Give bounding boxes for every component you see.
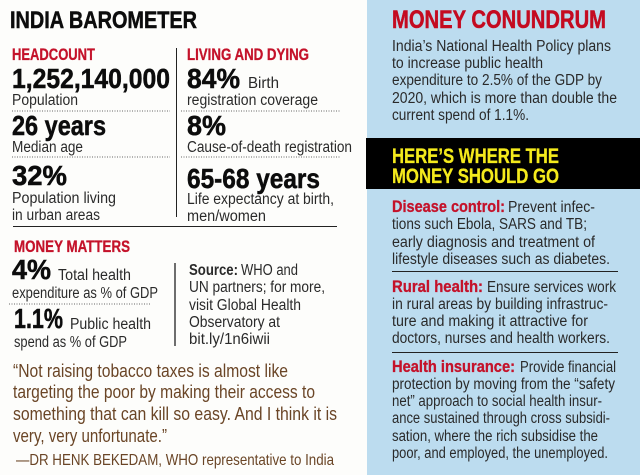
stat: public health spend — [14, 303, 151, 351]
stat: population — [12, 63, 170, 109]
source note: visit Global Health — [189, 297, 301, 314]
item: disease control: lifestyle diseases such as diabetes. — [392, 251, 610, 268]
item: rural health: in rural areas by building infrastruc- — [392, 296, 608, 313]
stat: public health spend: spend as % of GDP — [14, 334, 127, 351]
stat: birth registration: 84% — [187, 63, 240, 94]
item: rural health: doctors, nurses and health workers. — [392, 330, 610, 347]
item: disease control: Prevent infec- — [508, 199, 595, 216]
heading: LIVING AND DYING — [187, 46, 309, 64]
body text — [392, 38, 617, 124]
stat: median age — [12, 110, 106, 156]
title: INDIA BAROMETER — [10, 7, 197, 34]
stat: population: 1,252,140,000 — [12, 63, 170, 94]
item: health insurance: Provide financial — [520, 359, 616, 376]
stat: urban population — [12, 160, 116, 224]
quote: very, very unfortunate.” — [13, 426, 167, 446]
banner: here's where the money should go: MONEY SHOULD GO — [392, 165, 559, 188]
quote — [13, 361, 337, 469]
banner: here's where the money should go: HERE’S WHERE THE — [392, 145, 559, 168]
heading: MONEY MATTERS — [14, 238, 130, 256]
stat: median age: Median age — [12, 139, 83, 156]
stat: cause-of-death registration — [187, 110, 352, 156]
item: disease control: tions such Ebola, SARS and TB; — [392, 216, 587, 233]
stat: public health spend: 1.1% — [14, 303, 63, 334]
stat: cause-of-death registration: Cause-of-death registration — [187, 139, 352, 156]
stat: life expectancy — [187, 163, 334, 225]
item: rural health: ture and making it attractive for — [392, 313, 588, 330]
source note: Source: — [189, 262, 238, 279]
item: rural health — [392, 277, 616, 347]
source note — [189, 262, 325, 348]
stat: median age: 26 years — [12, 110, 106, 141]
item: rural health: Ensure services work — [487, 279, 616, 296]
source note: Observatory at — [189, 314, 281, 331]
item: health insurance: net” approach to social health insur- — [392, 393, 602, 410]
quote: “Not raising tobacco taxes is almost like — [13, 361, 288, 381]
stat: birth registration — [187, 63, 318, 109]
section: living and dying — [181, 46, 352, 225]
source note: WHO and — [241, 262, 298, 279]
body text: expenditure to 2.5% of the GDP by — [392, 72, 602, 89]
heading: HEADCOUNT — [12, 46, 95, 64]
item: health insurance — [392, 357, 616, 462]
panel: money conundrum — [366, 0, 640, 475]
stat: urban population: in urban areas — [12, 207, 100, 224]
quote: targeting the poor by making their access to — [13, 382, 315, 402]
stat: life expectancy: 65-68 years — [187, 163, 320, 194]
stat: birth registration: Birth — [248, 75, 279, 92]
panel background — [367, 0, 640, 475]
source note: bit.ly/1n6iwii — [189, 331, 270, 348]
section: headcount — [12, 46, 170, 224]
stat: urban population: Population living — [12, 190, 116, 207]
banner: here's where the money should go — [366, 138, 640, 189]
stat: public health spend: Public health — [70, 316, 151, 333]
item: health insurance: sation, where the rich subsidise the — [392, 428, 598, 445]
item: health insurance: Health insurance: — [392, 357, 515, 376]
stat: life expectancy: men/women — [187, 208, 266, 225]
body text: current spend of 1.1%. — [392, 107, 529, 124]
stat: cause-of-death registration: 8% — [187, 110, 226, 141]
item: health insurance: protection by moving from the “safety — [392, 376, 615, 393]
stat: life expectancy: Life expectancy at birth, — [187, 191, 334, 208]
item: disease control — [392, 197, 610, 268]
stat: total health expenditure: 4% — [12, 254, 51, 285]
quote: something that can kill so easy. And I think it is — [13, 404, 337, 424]
stat: total health expenditure — [12, 254, 158, 302]
stat: total health expenditure: Total health — [58, 267, 131, 284]
source note: UN partners; for more, — [189, 279, 325, 296]
section: money matters — [9, 238, 158, 351]
item: disease control: Disease control: — [392, 197, 505, 216]
body text: 2020, which is more than double the — [392, 90, 617, 107]
stat: birth registration: registration coverage — [187, 92, 318, 109]
quote attribution: —DR HENK BEKEDAM, WHO representative to India — [16, 452, 334, 469]
panel: india barometer — [9, 7, 352, 469]
stat: urban population: 32% — [12, 160, 67, 191]
stat: total health expenditure: expenditure as % of GDP — [12, 285, 158, 302]
item: disease control: early diagnosis and treatment of — [392, 234, 596, 251]
body text: India’s National Health Policy plans — [392, 38, 611, 55]
body text: to increase public health — [392, 55, 543, 72]
item: rural health: Rural health: — [392, 277, 483, 296]
stat: population: Population — [12, 92, 78, 109]
